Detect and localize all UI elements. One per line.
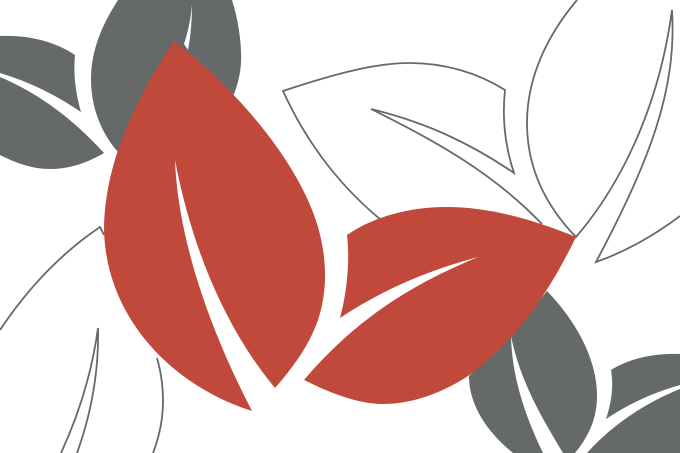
icon: grey leaf, top left bbox=[0, 36, 104, 169]
icon: grey leaf, bottom centre-right bbox=[469, 291, 597, 453]
icon: grey leaf, bottom right bbox=[587, 354, 680, 453]
icon: outline leaf, top centre bbox=[283, 63, 542, 224]
icon: outline leaf, bottom left bbox=[0, 227, 163, 453]
icon: outline leaf, top right bbox=[527, 0, 680, 262]
lower half of leaf bbox=[0, 77, 104, 169]
leaf vein bbox=[184, 4, 192, 50]
icon: red leaf, horizontal bbox=[304, 207, 576, 404]
lower half of leaf bbox=[587, 389, 680, 453]
right half of leaf bbox=[511, 291, 597, 453]
icon: red leaf, large vertical bbox=[104, 41, 325, 411]
icon: grey leaf, top centre bbox=[91, 0, 241, 152]
